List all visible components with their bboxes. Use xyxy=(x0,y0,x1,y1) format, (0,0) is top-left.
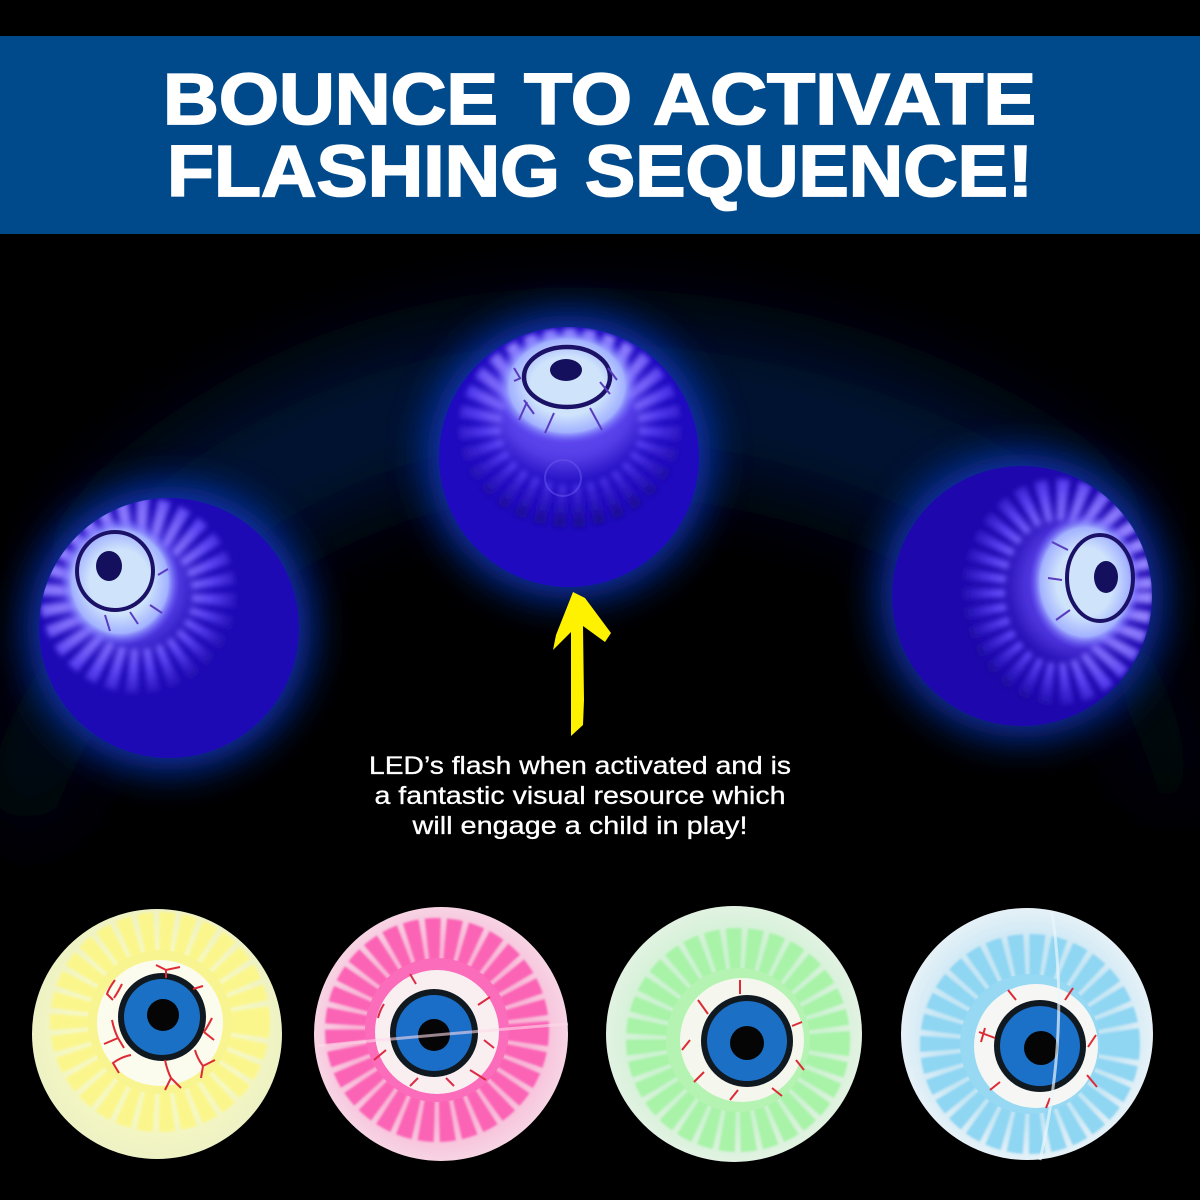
glowing ball: centre xyxy=(427,315,711,599)
iris xyxy=(701,995,793,1087)
motion glow arc xyxy=(10,390,1180,820)
veins xyxy=(105,569,168,631)
ball: green xyxy=(606,906,862,1162)
spikes xyxy=(984,500,1132,684)
iris xyxy=(994,1000,1086,1092)
sclera xyxy=(97,960,223,1086)
sclera xyxy=(375,970,499,1094)
ball: pink xyxy=(314,907,568,1161)
embossed mark xyxy=(545,460,581,496)
spikes xyxy=(648,950,828,1130)
veins xyxy=(979,988,1097,1108)
seam xyxy=(318,1024,568,1046)
sclera xyxy=(680,978,804,1102)
spikes xyxy=(62,519,214,671)
caption text: LED’s flash when activated and is xyxy=(369,752,791,780)
spikes xyxy=(942,956,1118,1132)
sclera xyxy=(974,984,1098,1108)
veins xyxy=(1048,542,1070,620)
spikes xyxy=(347,940,527,1120)
title: SEQUENCE! xyxy=(585,132,1033,212)
spikes xyxy=(480,350,660,506)
title: TO xyxy=(524,60,632,140)
glowing ball: right xyxy=(880,454,1164,738)
veins xyxy=(104,965,215,1090)
iris xyxy=(390,989,478,1077)
spikes xyxy=(72,934,248,1110)
veins xyxy=(514,368,617,433)
arrow: yellow xyxy=(553,592,611,736)
iris xyxy=(118,973,206,1061)
ball: yellow xyxy=(32,909,282,1159)
title banner xyxy=(0,36,1200,234)
caption text: will engage a child in play! xyxy=(411,812,748,840)
veins xyxy=(374,974,494,1086)
glowing ball: left xyxy=(27,486,311,770)
seam xyxy=(1040,912,1059,1160)
caption text: a fantastic visual resource which xyxy=(374,782,786,810)
title: FLASHING xyxy=(167,132,560,212)
title: ACTIVATE xyxy=(653,60,1036,140)
veins xyxy=(682,980,804,1100)
title: BOUNCE xyxy=(163,60,498,140)
ball: blue xyxy=(901,908,1153,1160)
